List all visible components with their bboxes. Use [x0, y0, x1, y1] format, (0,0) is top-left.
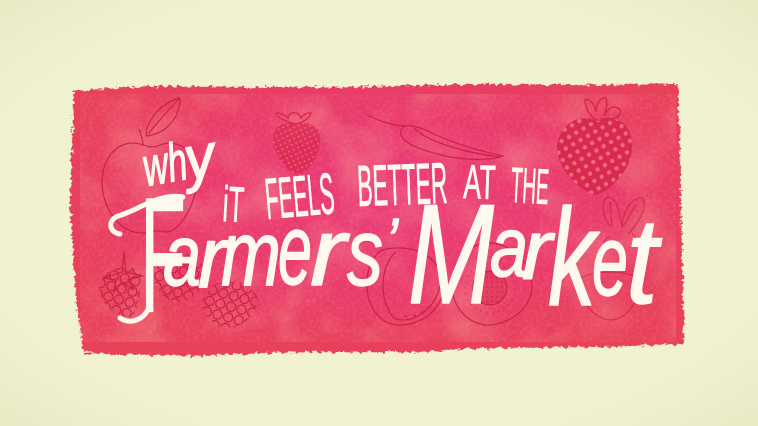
- heading: it feels better at the: BETTER: [356, 151, 448, 219]
- heading: Farmers' Market: r: [310, 199, 351, 306]
- heading: Farmers' Market: k: [548, 181, 600, 335]
- heading: Farmers' Market: s: [347, 199, 383, 306]
- heading: Farmers' Market: r: [522, 203, 555, 297]
- icon: small strawberry: [273, 113, 320, 175]
- icon: peach halves: [367, 243, 532, 325]
- heading: Farmers' Market: [111, 163, 663, 347]
- heading: it feels better at the: FEELS: [262, 161, 337, 232]
- heading: Farmers' Market: F: [140, 163, 186, 347]
- heading: Farmers' Market: ’: [386, 207, 399, 276]
- heading: why: y: [175, 121, 224, 195]
- icon: chili pepper: [367, 115, 503, 159]
- heading: Farmers' Market: t: [626, 193, 663, 329]
- icon: apple outline: [102, 98, 198, 233]
- panel texture: [80, 94, 676, 342]
- heading: Farmers' Market: m: [221, 203, 281, 305]
- heading: it feels better at the: iT: [221, 176, 245, 233]
- icon: large strawberry: [557, 98, 632, 195]
- heading: Farmers' Market: a: [163, 208, 201, 304]
- heading: Farmers' Market: a: [490, 200, 528, 294]
- heading: Farmers' Market: r: [198, 210, 229, 306]
- heading: why: wh: [138, 131, 192, 198]
- heading: Farmers' Market: e: [592, 205, 628, 317]
- text: THE: [509, 157, 550, 215]
- icon: raspberries: [99, 252, 258, 328]
- heading: Farmers' Market: e: [278, 194, 312, 306]
- heading: Farmers' Market: M: [408, 175, 495, 334]
- panel: rough painted red banner: [70, 84, 684, 356]
- heading: it feels better at the: AT: [463, 156, 496, 210]
- icon: beet with leaves: [576, 197, 644, 320]
- heading: it feels better at the: [221, 151, 550, 233]
